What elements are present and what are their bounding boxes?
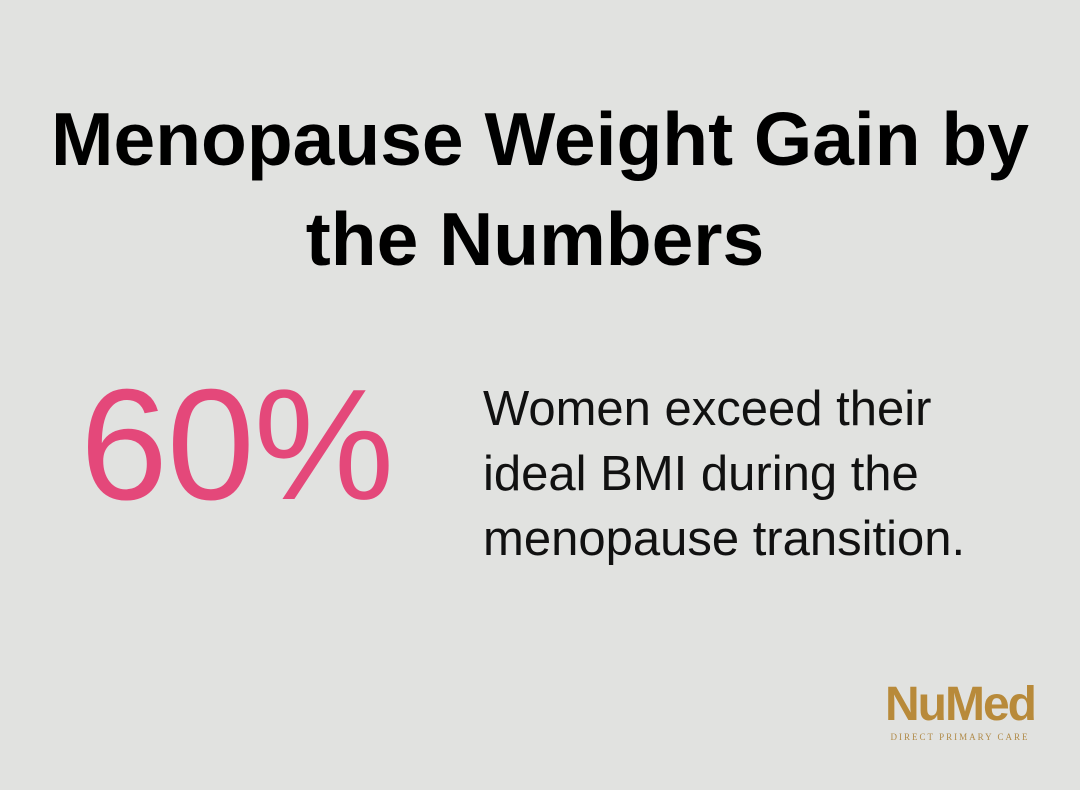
stat description: ideal BMI during the xyxy=(483,447,919,501)
stat description: Women exceed their xyxy=(483,382,932,436)
stat description xyxy=(483,382,965,566)
title xyxy=(51,97,1029,281)
big stat: 60%: 60% xyxy=(80,357,393,533)
title: Menopause Weight Gain by xyxy=(51,97,1029,181)
title: the Numbers xyxy=(306,197,764,281)
logo: NuMed: DIRECT PRIMARY CARE xyxy=(890,732,1030,742)
logo: NuMed: NuMed xyxy=(885,678,1035,731)
stat description: menopause transition. xyxy=(483,512,965,566)
